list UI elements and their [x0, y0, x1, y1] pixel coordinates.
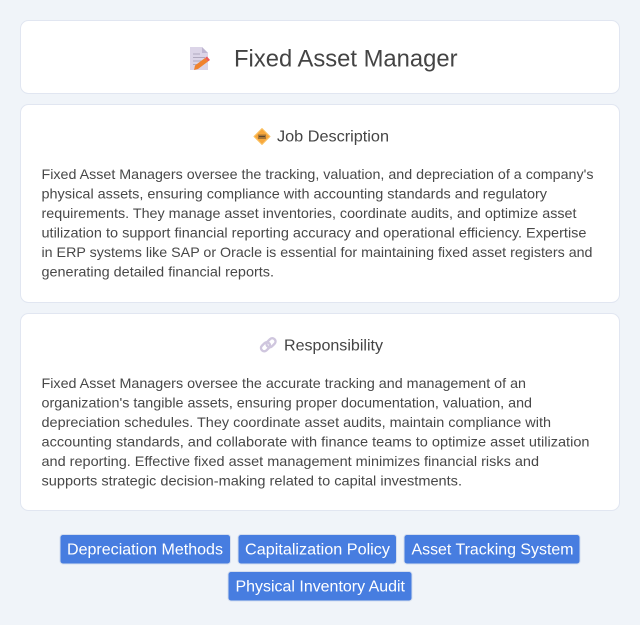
text block: job description: physical assets, ensuring compliance with accounting standards and regulatory	[42, 186, 547, 202]
tag: depreciation methods: Depreciation Methods	[67, 542, 223, 558]
text block: responsibility: and reporting. Effective fixed asset management minimizes financial risks and	[42, 453, 539, 469]
tag: physical inventory audit	[228, 572, 412, 601]
text block: responsibility: depreciation schedules. They coordinate asset audits, maintain compliance with	[42, 414, 551, 430]
text block: responsibility: Fixed Asset Managers oversee the accurate tracking and management of an	[42, 375, 526, 391]
text block: job description: Fixed Asset Managers oversee the tracking, valuation, and depreciation of a company's	[42, 166, 594, 182]
tag: asset tracking system: Asset Tracking System	[412, 542, 574, 558]
text block: responsibility: supports strategic decision-making related to capital investments.	[42, 472, 462, 488]
tag: capitalization policy: Capitalization Policy	[245, 542, 390, 558]
text block: job description: utilization to support financial reporting accuracy and operational efficiency. Expertise	[42, 224, 587, 240]
text block: job description: in ERP systems like SAP or Oracle is essential for maintaining fixed asset registers and	[42, 244, 592, 260]
panel: job description	[20, 104, 620, 302]
tag: depreciation methods	[60, 534, 230, 564]
heading: responsibility: Responsibility	[284, 338, 383, 354]
icon: orange diamond	[254, 128, 270, 144]
panel: responsibility	[20, 314, 620, 510]
tag list	[60, 534, 580, 601]
text block: responsibility: organization's tangible assets, ensuring proper documentation, valuation, and	[42, 394, 532, 410]
heading: job description: Job Description	[277, 128, 389, 146]
text block: job description	[42, 166, 594, 280]
panel: title card	[20, 20, 620, 94]
text block: job description: generating detailed financial reports.	[42, 264, 274, 280]
icon: chain link	[260, 337, 277, 353]
text block: responsibility	[42, 375, 590, 488]
tag: capitalization policy	[238, 534, 396, 564]
tag: physical inventory audit: Physical Inventory Audit	[236, 578, 406, 596]
text block: responsibility: accounting standards, and collaborate with finance teams to optimize asset utilization	[42, 434, 590, 450]
text block: job description: requirements. They manage asset inventories, coordinate audits, and optimize asset	[42, 205, 577, 221]
tag: asset tracking system	[404, 534, 580, 564]
title: Fixed Asset Manager	[234, 46, 458, 72]
icon: document with pencil	[190, 47, 210, 70]
